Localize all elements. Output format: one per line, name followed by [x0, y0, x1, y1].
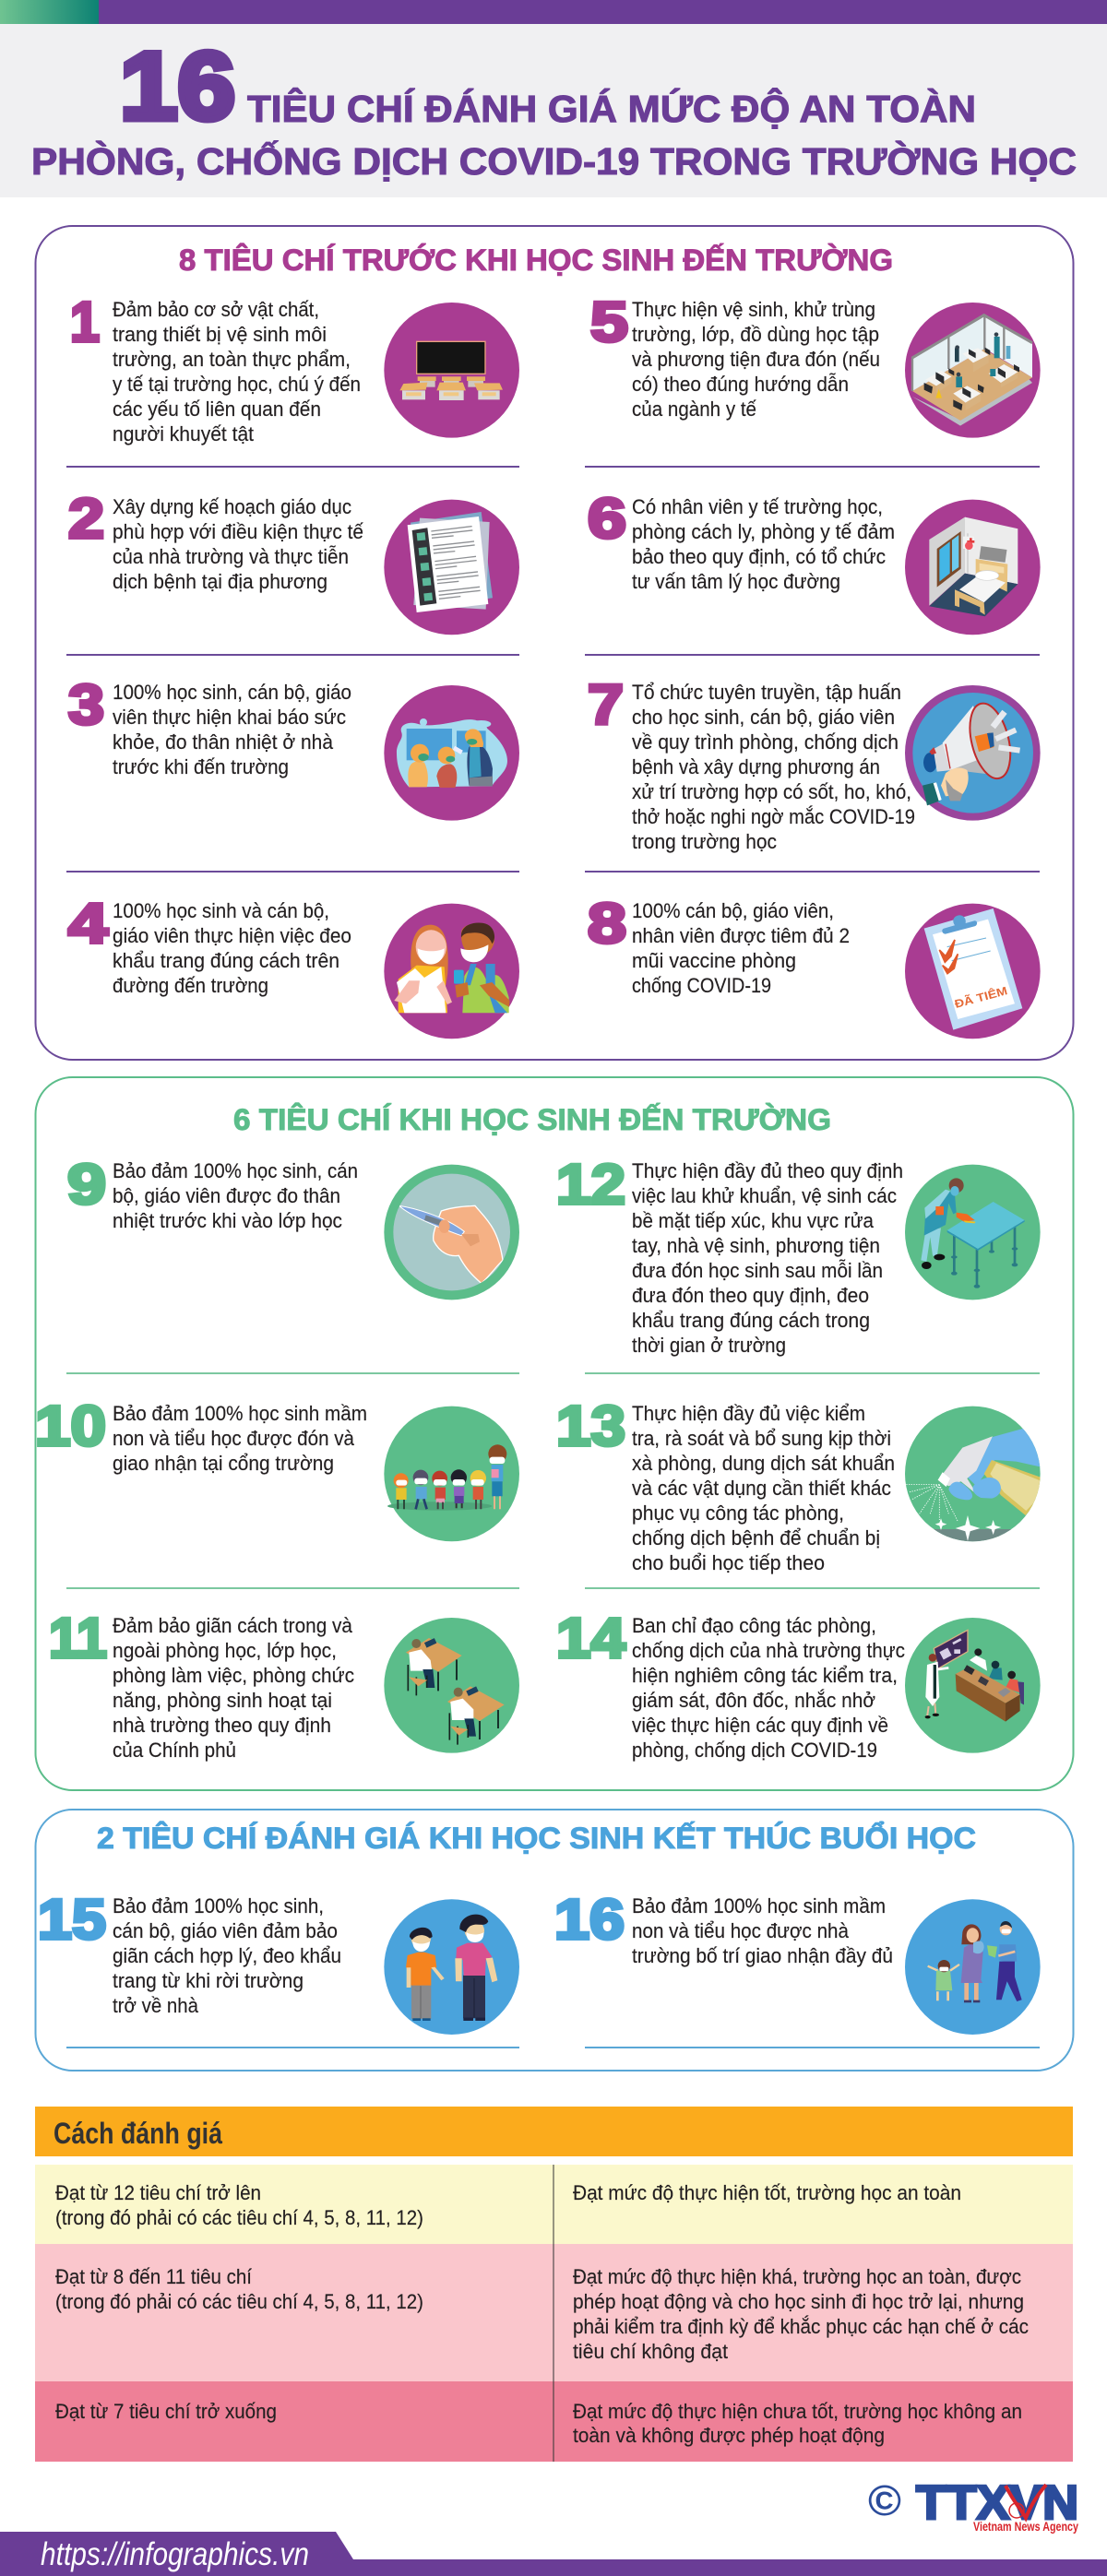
criterion 2 text: dịch bệnh tại địa phương: [113, 570, 327, 593]
icon: temperature check at home: [384, 685, 519, 821]
criterion 12 text: bề mặt tiếp xúc, khu vực rửa: [632, 1209, 875, 1232]
criterion 1 text: y tế tại trường học, chú ý đến: [113, 373, 361, 396]
table row: good: [35, 2165, 1073, 2244]
criterion 12 text: thời gian ở trường: [632, 1334, 786, 1357]
table header: Cách đánh giá: [54, 2117, 222, 2150]
criterion 2 text: [113, 495, 363, 593]
icon: isolation room: [905, 500, 1041, 635]
logo: TTXVN: TTXVN: [916, 2476, 1078, 2530]
number 1: 1: [70, 291, 100, 353]
criterion 4 text: [113, 899, 351, 997]
icon: vaccinated clipboard: [905, 904, 1041, 1039]
panel: 6 criteria when students arrive: [35, 1077, 1074, 1790]
panel: 2 criteria after school: [35, 1810, 1074, 2071]
criterion 14 text: [632, 1614, 905, 1762]
table row: fair: tiêu chí không đạt: [573, 2340, 728, 2363]
criterion 15 text: trở về nhà: [113, 1994, 199, 2017]
criterion 13 text: [632, 1402, 895, 1574]
criterion 16 text: trường bố trí giao nhận đầy đủ: [632, 1944, 893, 1967]
icon: handover to parent: [905, 1899, 1041, 2035]
criterion 6 text: bảo theo quy định, có tổ chức: [632, 545, 886, 568]
criterion 11 text: phòng làm việc, phòng chức: [113, 1664, 354, 1687]
criterion 11 text: Đảm bảo giãn cách trong và: [113, 1614, 353, 1637]
table row: poor: [35, 2381, 1073, 2462]
criterion 12 text: Thực hiện đầy đủ theo quy định: [632, 1159, 903, 1182]
number 10: 10: [35, 1395, 106, 1457]
criterion 12 text: [632, 1159, 903, 1357]
criterion 4: [68, 892, 519, 1039]
criterion 9 text: [113, 1159, 358, 1232]
table row: fair: Đạt mức độ thực hiện khá, trường học an toàn, được: [573, 2265, 1021, 2288]
header band: [0, 0, 1107, 197]
criterion 15 text: Bảo đảm 100% học sinh,: [113, 1894, 324, 1917]
criterion 10 text: Bảo đảm 100% học sinh mầm: [113, 1402, 367, 1425]
criterion 15 text: [113, 1894, 341, 2017]
criterion 16 text: [632, 1894, 893, 1967]
criterion 13 text: Thực hiện đầy đủ việc kiểm: [632, 1402, 865, 1425]
criterion 2 text: Xây dựng kế hoạch giáo dục: [113, 495, 351, 518]
number 11: 11: [49, 1607, 107, 1669]
number 13: 13: [556, 1395, 625, 1457]
criterion 14: [556, 1607, 1041, 1762]
criterion 7 text: trong trường học: [632, 830, 777, 853]
criterion 3 text: viên thực hiện khai báo sức: [113, 706, 346, 729]
criterion 12 text: việc lau khử khuẩn, vệ sinh các: [632, 1184, 897, 1207]
criterion 14 text: chống dịch của nhà trường thực: [632, 1639, 905, 1662]
criterion 11 text: ngoài phòng học, lớp học,: [113, 1639, 337, 1662]
criterion 13 text: xà phòng, dung dịch sát khuẩn: [632, 1452, 895, 1475]
criterion 13: [556, 1395, 1044, 1574]
criterion 4 text: giáo viên thực hiện việc đeo: [113, 924, 351, 947]
criterion 11 text: nhà trường theo quy định: [113, 1714, 331, 1737]
icon: children with teacher: [384, 1407, 519, 1541]
criterion 10: [35, 1395, 519, 1541]
criterion 6 text: tư vấn tâm lý học đường: [632, 570, 840, 593]
criterion 7 text: về quy trình phòng, chống dịch: [632, 730, 899, 754]
criterion 14 text: hiện nghiêm công tác kiểm tra,: [632, 1664, 898, 1687]
logo: TTXVN: [868, 2476, 1078, 2534]
table row: fair: Đạt từ 8 đến 11 tiêu chí: [55, 2265, 252, 2288]
criterion 5: [590, 291, 1041, 438]
number 2: 2: [68, 487, 104, 550]
title line 2: PHÒNG, CHỐNG DỊCH COVID-19 TRONG TRƯỜNG HỌC: [31, 140, 1077, 183]
criterion 5 text: và phương tiện đưa đón (nếu: [632, 348, 880, 371]
criterion 13 text: tra, rà soát và bổ sung kịp thời: [632, 1427, 891, 1450]
icon: blackboard and desks: [384, 303, 519, 438]
logo: TTXVN: Vietnam News Agency: [973, 2519, 1078, 2534]
criterion 5 text: trường, lớp, đồ dùng học tập: [632, 323, 879, 346]
criterion 7 text: Tổ chức tuyên truyền, tập huấn: [632, 681, 901, 704]
criterion 1: [70, 291, 519, 445]
table row: poor: toàn và không được phép hoạt động: [573, 2424, 885, 2447]
heading: section 1: 8 TIÊU CHÍ TRƯỚC KHI HỌC SINH ĐẾN TRƯỜNG: [179, 243, 893, 277]
criterion 7 text: xử trí trường hợp có sốt, ho, khó,: [632, 780, 911, 803]
criterion 7 text: [632, 681, 915, 853]
icon: steering board meeting: [905, 1618, 1041, 1753]
heading: section 3: 2 TIÊU CHÍ ĐÁNH GIÁ KHI HỌC SINH KẾT THÚC BUỔI HỌC: [97, 1822, 976, 1855]
criterion 3 text: khỏe, đo thân nhiệt ở nhà: [113, 730, 334, 754]
criterion 1 text: người khuyết tật: [113, 422, 254, 445]
criterion 1 text: [113, 298, 361, 445]
criterion 9 text: bộ, giáo viên được đo thân: [113, 1184, 340, 1207]
criterion 14 text: phòng, chống dịch COVID-19: [632, 1739, 877, 1762]
table row: good: (trong đó phải có các tiêu chí 4, 5, 8, 11, 12): [55, 2206, 423, 2229]
criterion 10 text: [113, 1402, 367, 1475]
number 8: 8: [588, 892, 626, 955]
criterion 8 text: nhân viên được tiêm đủ 2: [632, 924, 850, 947]
table row: fair: (trong đó phải có các tiêu chí 4, 5, 8, 11, 12): [55, 2290, 423, 2313]
table row: fair: [35, 2244, 1073, 2381]
criterion 16 text: Bảo đảm 100% học sinh mầm: [632, 1894, 886, 1917]
criterion 8 text: chống COVID-19: [632, 974, 771, 997]
criterion 7 text: bệnh và xây dựng phương án: [632, 755, 880, 778]
criterion 14 text: giám sát, đôn đốc, nhắc nhở: [632, 1689, 875, 1712]
criterion 3: [68, 673, 519, 821]
criterion 5 text: của ngành y tế: [632, 398, 756, 421]
criterion 1 text: trường, an toàn thực phẩm,: [113, 348, 351, 371]
criterion 13 text: chống dịch bệnh để chuẩn bị: [632, 1526, 880, 1549]
criterion 6: [588, 487, 1041, 635]
number 16: 16: [554, 1888, 625, 1951]
table row: poor: Đạt từ 7 tiêu chí trở xuống: [55, 2400, 277, 2423]
criterion 13 text: phục vụ công tác phòng,: [632, 1502, 844, 1525]
icon: cleaning table: [905, 1165, 1041, 1300]
criterion 15 text: trang từ khi rời trường: [113, 1969, 304, 1992]
criterion 11 text: [113, 1614, 354, 1762]
panel: 8 criteria before students arrive: [35, 226, 1074, 1060]
title line 1: TIÊU CHÍ ĐÁNH GIÁ MỨC ĐỘ AN TOÀN: [247, 88, 976, 130]
criterion 15 text: giãn cách hợp lý, đeo khẩu: [113, 1944, 341, 1967]
criterion 11 text: năng, phòng sinh hoạt tại: [113, 1689, 332, 1712]
title number 16: 16: [120, 33, 235, 140]
table row: good: Đạt mức độ thực hiện tốt, trường học an toàn: [573, 2181, 961, 2204]
criterion 7 text: thở hoặc nghi ngờ mắc COVID-19: [632, 805, 915, 828]
criterion 3 text: 100% học sinh, cán bộ, giáo: [113, 681, 351, 704]
criterion 16: [554, 1888, 1041, 2035]
criterion 12 text: đưa đón theo quy định, đeo: [632, 1284, 869, 1307]
table row: fair: phép hoạt động và cho học sinh đi học trở lại, nhưng: [573, 2290, 1024, 2313]
criterion 15: [38, 1888, 519, 2035]
criterion 8 text: 100% cán bộ, giáo viên,: [632, 899, 834, 922]
number 15: 15: [38, 1888, 106, 1951]
number 4: 4: [68, 892, 108, 955]
icon: students wearing masks: [384, 904, 519, 1039]
criterion 12 text: đưa đón học sinh sau mỗi lần: [632, 1259, 883, 1282]
table row: poor: Đạt mức độ thực hiện chưa tốt, trường học không an: [573, 2400, 1022, 2423]
number 6: 6: [588, 487, 626, 550]
criterion 1 text: các yếu tố liên quan đến: [113, 398, 321, 421]
table row: good: Đạt từ 12 tiêu chí trở lên: [55, 2181, 261, 2204]
criterion 5 text: có) theo đúng hướng dẫn: [632, 373, 849, 396]
criterion 11: [49, 1607, 519, 1762]
criterion 13 text: và các vật dụng cần thiết khác: [632, 1477, 891, 1500]
criterion 14 text: việc thực hiện các quy định về: [632, 1714, 888, 1737]
panel: evaluation table: [35, 2107, 1073, 2462]
criterion 8 text: [632, 899, 850, 997]
criterion 10 text: non và tiểu học được đón và: [113, 1427, 355, 1450]
criterion 2 text: của nhà trường và thực tiễn: [113, 545, 349, 568]
criterion 4 text: 100% học sinh và cán bộ,: [113, 899, 329, 922]
icon: checklist: [384, 500, 519, 635]
criterion 1 text: trang thiết bị vệ sinh môi: [113, 323, 327, 346]
criterion 9: [67, 1153, 519, 1300]
criterion 3 text: [113, 681, 351, 778]
criterion 15 text: cán bộ, giáo viên đảm bảo: [113, 1919, 338, 1942]
icon: students spaced at desks: [384, 1618, 519, 1753]
criterion 1 text: Đảm bảo cơ sở vật chất,: [113, 298, 319, 321]
criterion 10 text: giao nhận tại cổng trường: [113, 1452, 334, 1475]
icon: thermometer in hand: [384, 1165, 519, 1300]
number 7: 7: [588, 673, 624, 736]
criterion 9 text: nhiệt trước khi vào lớp học: [113, 1209, 342, 1232]
criterion 8 text: mũi vaccine phòng: [632, 949, 796, 972]
footer url: https://infographics.vn: [41, 2536, 309, 2572]
icon: classroom disinfection: [905, 303, 1041, 438]
number 3: 3: [68, 673, 104, 736]
criterion 8: [588, 892, 1041, 1039]
criterion 3 text: trước khi đến trường: [113, 755, 289, 778]
criterion 12 text: tay, nhà vệ sinh, phương tiện: [632, 1234, 880, 1257]
criterion 14 text: Ban chỉ đạo công tác phòng,: [632, 1614, 876, 1637]
criterion 7 text: cho học sinh, cán bộ, giáo viên: [632, 706, 895, 729]
heading: section 2: 6 TIÊU CHÍ KHI HỌC SINH ĐẾN TRƯỜNG: [233, 1103, 831, 1136]
icon: vaccinated clipboard: ĐÃ TIÊM: [953, 983, 1009, 1011]
footer bar: [0, 2532, 1107, 2576]
criterion 11 text: của Chính phủ: [113, 1739, 236, 1762]
criterion 7: [588, 673, 1041, 853]
criterion 2 text: phù hợp với điều kiện thực tế: [113, 520, 363, 543]
criterion 2: [68, 487, 519, 635]
title: [31, 33, 1077, 183]
criterion 4 text: đường đến trường: [113, 974, 268, 997]
table row: fair: phải kiểm tra định kỳ để khắc phục các hạn chế ở các: [573, 2315, 1029, 2338]
table header: [35, 2107, 1073, 2156]
logo: TTXVN: ©: [868, 2476, 901, 2524]
icon: megaphone: [905, 685, 1041, 821]
criterion 6 text: [632, 495, 895, 593]
number 12: 12: [556, 1153, 625, 1216]
criterion 6 text: phòng cách ly, phòng y tế đảm: [632, 520, 895, 543]
criterion 16 text: non và tiểu học được nhà: [632, 1919, 850, 1942]
icon: two masked people: [384, 1899, 519, 2035]
criterion 13 text: cho buổi học tiếp theo: [632, 1551, 825, 1574]
criterion 5 text: [632, 298, 880, 421]
number 9: 9: [67, 1153, 106, 1216]
number 5: 5: [590, 291, 628, 353]
number 14: 14: [556, 1607, 625, 1669]
criterion 12: [556, 1153, 1041, 1357]
criterion 5 text: Thực hiện vệ sinh, khử trùng: [632, 298, 875, 321]
criterion 12 text: khẩu trang đúng cách trong: [632, 1309, 870, 1332]
criterion 6 text: Có nhân viên y tế trường học,: [632, 495, 883, 518]
criterion 4 text: khẩu trang đúng cách trên: [113, 949, 339, 972]
criterion 9 text: Bảo đảm 100% học sinh, cán: [113, 1159, 358, 1182]
icon: disinfectant spray: [905, 1407, 1044, 1545]
